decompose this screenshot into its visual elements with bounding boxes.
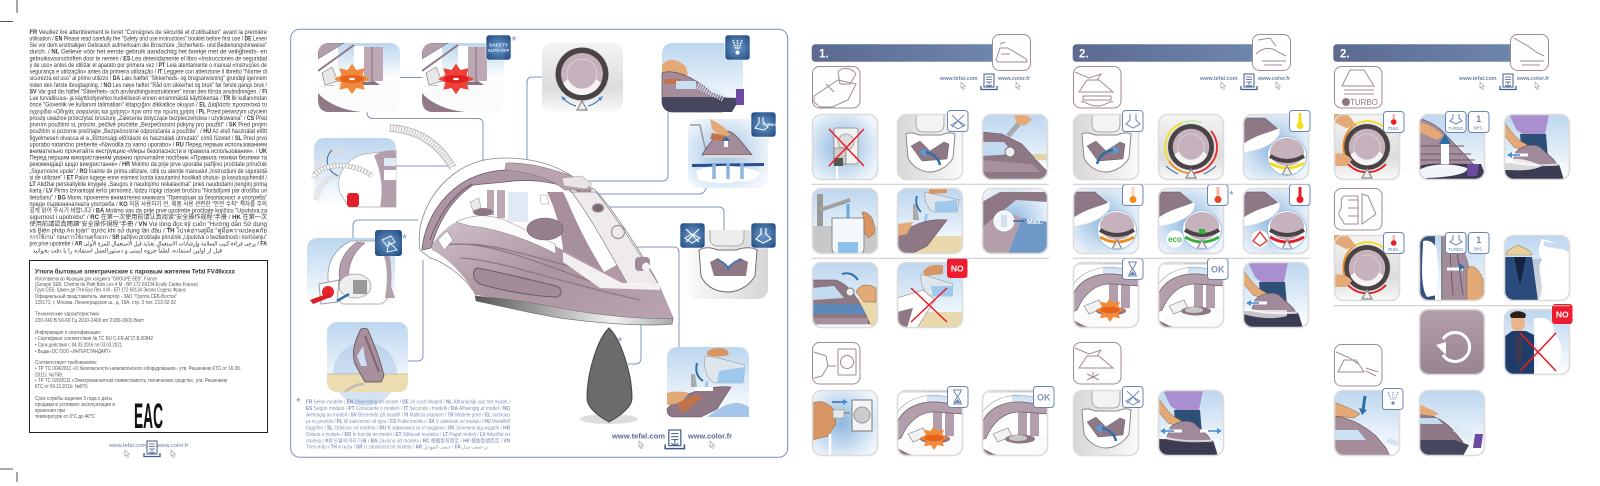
icon: one second <box>1468 112 1489 132</box>
text block: product details: 220-240 В 50-60 Гц 2010-2400 вт/ 2180-2600 Ватт <box>35 318 144 324</box>
tile: orange warning light <box>318 43 400 112</box>
small icon: fill water <box>812 66 860 108</box>
icon: no steam <box>1122 386 1143 408</box>
tile: yellow setting <box>1243 114 1309 180</box>
website links: www.tefal.com <box>939 76 978 82</box>
tile: vertical steaming <box>1419 235 1485 301</box>
tile: light off <box>982 390 1048 456</box>
icon: hourglass <box>948 386 968 408</box>
text block: multilingual safety notice: εγχειρίδιο «Οδηγίες ασφαλείας και χρήσης» πριν από την πρώτη χρήση / PL Przed pierwszym użyciem <box>30 108 267 115</box>
text block: product details: • ТР ТС 004/2011 «О безопасности низковольтного оборудования», утв. Решением КТС от 16.08. <box>35 366 241 372</box>
badge: NO: NO <box>1556 310 1569 320</box>
tile: max temperature dial <box>1334 235 1400 301</box>
icon: anti-scale <box>375 230 402 256</box>
text block: product details: Официальный представитель, импортёр - ЗАО "Группа СЕБ-Восток" <box>35 293 177 300</box>
icon: OK <box>1208 258 1228 280</box>
header bar 1 <box>812 44 1002 62</box>
small icon: spray iron <box>1334 344 1382 386</box>
text block: product details: 2011г. №768; <box>35 373 63 379</box>
crop marks <box>0 0 17 482</box>
small icon: plug <box>812 342 860 384</box>
text block: multilingual safety notice: inden den første ibrugtagning. / NO Les nøye heftet "Råd om sikkerhet og bruk" før første gangs bruk / <box>30 82 267 89</box>
text block: product details: (Groupe SEB, Chemin du Petit Bois Les 4 M - BP 172 69134 Ecully Cedex France) <box>35 282 198 288</box>
website links: www.color.fr <box>997 76 1031 82</box>
text block: product details: Груп СЕБ, Шмен де Пти Буа Лез 4 М - БП 172 69134 Эколи Седекс Франс <box>35 288 186 294</box>
soleplate variant <box>580 328 638 424</box>
icon: OK: OK <box>1037 392 1051 402</box>
text block: multilingual safety notice: рекомендації щодо використання» / HR Molimo da prije prve uporabe pažljivo pročitate priručnik <box>30 161 268 168</box>
footnote: depending on model: * <box>296 395 301 409</box>
asterisk note marker: * <box>402 231 407 246</box>
icon: max temperature <box>1384 232 1404 254</box>
text block: multilingual safety notice: „Sigurnosne upute" / RO Înainte de prima utilizare, citiți cu atenție manualul „Instrucțiuni de siguranță <box>30 168 267 175</box>
icon: max temperature: max. <box>1388 247 1400 253</box>
tile: ironing with steam <box>1243 262 1309 328</box>
text block: multilingual safety notice: prvním použitím si, prosím, pečlivě pročtěte „Bezpečnostní pokyny pro použití" / SK Pred prvým <box>30 122 267 128</box>
tile: wait for light <box>897 390 963 456</box>
panel: Russian product information box: EAC <box>134 397 163 436</box>
section 1: filling <box>812 34 1054 456</box>
header bar 2 <box>1333 44 1523 62</box>
tile: turbo burst <box>1419 114 1485 180</box>
small icon: steam iron <box>1074 66 1121 108</box>
text block: multilingual safety notice: преди първоначалната употреба / KO 처음 사용하기 전, 제품 사용 관련한 "안전 수칙" 책자를 주의 <box>30 200 267 208</box>
tile: open filler cap <box>982 114 1048 180</box>
tile: return to start <box>1419 309 1485 375</box>
website links <box>1199 74 1291 90</box>
header icon: iron outline <box>992 34 1030 70</box>
tile: temperature dial <box>1158 114 1224 180</box>
soleplate edge <box>475 296 673 325</box>
icon: OK: OK <box>1211 264 1225 274</box>
tile: selector no steam <box>897 114 963 180</box>
tile: close cap <box>812 262 878 328</box>
text block: multilingual safety notice: și de utilizare" / ET Palun lugege enne esimest korda kasutamist hoolikalt ohutus- ja kasutusjuhendit / <box>30 174 267 182</box>
icon: turbo <box>1446 112 1466 132</box>
icon: max temperature <box>1384 112 1404 132</box>
icon: steam on <box>751 223 776 248</box>
header icon: iron outline <box>1252 34 1290 70</box>
header icon: iron outline <box>1510 34 1548 70</box>
text block: multilingual safety notice: y de uso» antes de utilizar el aparato por primera vez / PT Leia atentamente o manual «Instruções de <box>30 62 267 69</box>
text block: product details <box>35 276 241 420</box>
text block: multilingual safety notice: proszę uważnie przeczytać broszurę „Zalecenia dotyczące bezpieczeństwa i użytkowania" / CS Před <box>30 115 267 122</box>
tile: ready <box>1158 262 1224 328</box>
website links: www.color.fr <box>1257 76 1291 82</box>
website links: left column <box>108 441 188 458</box>
asterisk note marker: * <box>618 334 623 349</box>
text block: product details: • Выдан ОС ООО «ИНТЕРСТАНДАРТ» <box>35 349 111 355</box>
text block: multilingual safety notice <box>30 29 268 254</box>
text block: multilingual safety notice: Sie vor dem erstmaligen Gebrauch aufmerksam die Broschüre „Sicherheits- und Bedienungshinweise" <box>30 42 267 49</box>
website links <box>939 74 1031 90</box>
icon: one second: sec. <box>1473 126 1484 132</box>
tile: eco setting: eco <box>1168 235 1182 244</box>
tile: orange setting <box>1073 188 1139 254</box>
text block: product details: Соответствует требованиям: <box>35 360 97 366</box>
icon: high temperature <box>1290 184 1310 206</box>
text block: multilingual safety notice: pre prve upotrebe / AR يرجى قراءة كتيب السلامة وإرشادات الاستعمال بعناية قبل الاستعمال للمرة الأولى / FA <box>30 240 267 248</box>
text block: product details: Технические характеристики <box>35 312 99 318</box>
asterisk note marker: * <box>512 33 517 48</box>
icon: medium temperature <box>1122 184 1143 206</box>
badge: NO <box>947 258 968 278</box>
tile: max level <box>982 188 1048 254</box>
tile: spraying <box>1419 390 1485 456</box>
tile: selector off <box>1073 390 1139 456</box>
text block: product details: Срок службы изделия 3 года с даты <box>35 396 112 402</box>
tile: plug in <box>812 390 878 456</box>
icon: one second: 1 <box>1476 114 1481 124</box>
footnote: depending on model: με το μοντέλο / PL W zależności od typu / CS Podle modelu / SK V závislosti od modelu / HU Modelltől <box>306 418 510 425</box>
tile: red warning light <box>422 43 504 112</box>
footnote: depending on model <box>296 395 510 450</box>
section 2: steam ironing <box>1072 34 1310 456</box>
website links: main panel: www.color.fr <box>687 434 732 440</box>
footnote: depending on model: ES Según modelo / PT Consoante o modelo / IT Secondo i modelli / DA Afhængig af model / NO <box>306 406 510 412</box>
text block: multilingual safety notice: внимательно прочитайте инструкцию «Меры безопасности и правила использования». / UK <box>30 148 267 155</box>
icon: turbo <box>1446 232 1466 254</box>
icon: no steam <box>948 110 968 132</box>
tile: ironing with burst <box>1504 114 1570 180</box>
main iron illustration <box>390 128 673 325</box>
text block: product details: 125171, г. Москва, Ленинградское ш., д. 16А, стр. 3 тел. 213-32-32 <box>35 300 176 306</box>
icon: steam off <box>680 223 705 248</box>
badge: NO: NO <box>951 264 964 274</box>
website links <box>1458 74 1550 90</box>
text block: multilingual safety notice: 깊게 읽어 주시기 바랍니다 / BA Molimo vas da prije prve upotrebe pročitate knjižicu "Uputstva za <box>30 207 268 215</box>
text block: multilingual safety notice: gebruiksvoorschriften door te nemen / ES Lea detenidamente el libro «Instrucciones de seguridad <box>30 55 267 62</box>
text block: product details: температуре от 0°C до 40°C <box>35 414 95 420</box>
tile: steam selector <box>688 230 768 299</box>
tile: high setting <box>1243 188 1309 254</box>
tile: selector steam <box>1073 114 1139 180</box>
footnote: depending on model: modeļa / KO 모델에 따라 다름 / BA Zavisno od modela / RC 根据型号而定 / HK 根據型號而定 / VN <box>306 436 510 444</box>
website links: left column: www.color.fr <box>156 443 188 449</box>
small icon: turbo iron: TURBO <box>1350 98 1378 107</box>
website links: www.tefal.com <box>1199 76 1238 82</box>
tile: fill jug at tap <box>812 188 878 254</box>
icon: low temperature <box>1290 110 1310 132</box>
text block: product details: • Сертификат соответствия № ТС RU C-FR.АГ27.В.00842 <box>35 336 153 342</box>
tile: spray button press <box>1334 390 1400 456</box>
text block: multilingual safety notice: FR Veuillez lire attentivement le livret "Consignes de sécurité et d'utilisation" avant la première <box>30 29 268 36</box>
footnote: depending on model: függően / SL Odvisno od modela / RU В зависимости от модели / UK Залежно від моделі / HR <box>306 426 510 432</box>
text block: multilingual safety notice: sicurezza ed uso" al primo utilizzo / DA Læs hæftet "Sikkerheds- og brugsanvisning" grundigt igennem <box>30 75 267 82</box>
website links: main panel <box>611 430 732 449</box>
tile: spray button <box>662 43 744 112</box>
icon: one second: sec. <box>1473 246 1484 252</box>
small icon: turbo iron <box>1334 66 1382 108</box>
tile: anti-scale switch <box>307 238 395 308</box>
icon: one second <box>1468 232 1489 254</box>
text block: multilingual safety notice: figyelmesen olvassa el a „Biztonsági előírások és használati útmutató" című füzetet / SL Pred prvo <box>30 135 267 142</box>
text block: multilingual safety notice: kartą / LV Pirms izmantojat ierīci pirmoreiz, lūdzu rūpīgi izlasiet brošūru "Norādījumi par drošību un <box>30 188 267 195</box>
tile: do not steam on clothes worn <box>1504 309 1570 375</box>
text block: multilingual safety notice: và Biện pháp An toàn" trước khi sử dụng lần đầu / TH โปรดอ่านคู่มือ "คู่มือความปลอดภัย <box>30 226 267 234</box>
text block: product details: продажи в условиях эксплуатации и <box>35 402 115 408</box>
icon: turbo: TURBO <box>1448 126 1464 131</box>
tile: eco setting <box>1158 188 1224 254</box>
footnote: depending on model: Theo mẫu / TH ตามรุ่น / SR U zavisnosti od modela / AR حسب الموديل / FA بر حسب مدل <box>306 444 488 450</box>
header bar 2: 2. <box>1340 48 1350 60</box>
tile: jacket on hanger <box>1504 235 1570 301</box>
icon: steam <box>1122 110 1143 132</box>
text block: multilingual safety notice: segurança e utilização» antes da primeira utilização / IT Leggere con attenzione il libretto "Norme di <box>30 68 267 76</box>
tile: iron on its heel <box>327 322 408 406</box>
header bar 1: 1. <box>819 48 829 60</box>
icon: one second: 1 <box>1476 235 1481 245</box>
text block: multilingual safety notice: použitím si pozorne prečítajte „Bezpečnostné odporúčania a použitie". / HU Az első használat előtt <box>30 128 267 135</box>
footnote: depending on model: FR Selon modèle / EN Depending on model / DE Je nach Modell / NL Afhankelijk van het model / <box>306 400 510 406</box>
icon: spray <box>725 35 750 60</box>
text block: multilingual safety notice: sigurnost i upotrebu" / RC 在第一次使用前请认真阅读"安全操作规程"手册 / HK 在第一次 <box>30 213 267 221</box>
icon: spray <box>1382 388 1403 410</box>
power cord <box>390 128 453 168</box>
text block: multilingual safety notice: قبل از اولین استفاده، لطفاً جزوه ایمنی و دستورالعمل استفاده را با دقت بخوانید <box>33 246 222 254</box>
text block: multilingual safety notice: önce "Güvenlik ve kullanım talimatları" kitapçığını dikkatlice okuyun / EL Διαβάστε προσεκτικά το <box>30 102 267 109</box>
tile: max temperature dial <box>1334 114 1400 180</box>
asterisk note marker: * <box>1229 188 1234 202</box>
tile: wait for light <box>1073 262 1139 328</box>
tile: unplugged warning <box>812 114 878 180</box>
icon: max temperature: max. <box>1388 126 1400 132</box>
text block: multilingual safety notice: LT Atidžiai perskaitykite knygelę „Saugos ir naudojimo reikalavimai" prieš naudodami įrenginį pirmą <box>30 181 267 188</box>
website links: left column: www.tefal.com <box>108 443 147 449</box>
text block: multilingual safety notice: Перед першим використанням уважно прочитайте посібник «Правила техніки безпеки та <box>30 155 268 162</box>
tile: thermostat dial <box>542 43 623 112</box>
small icon: dry iron <box>1074 342 1121 384</box>
badge: NO <box>1552 304 1572 324</box>
tile: dry ironing <box>1158 390 1224 456</box>
small icon: vertical steam <box>1334 188 1382 230</box>
footnote: depending on model: Avhengig av modell / SV Beroende på modell / FI Mallista riippuen / TR Modele göre / EL ανάλογα <box>306 412 510 418</box>
tile: pour water <box>897 188 963 254</box>
footnote: depending on model: Ovisno o modelu / RO În funcție de model / ET Sõltuvalt mudelist / LT Pagal modelį / LV Atkarībā no <box>306 431 510 438</box>
website links: www.color.fr <box>1516 76 1550 82</box>
text block: product details: КТС от 09.12.2011г. №879; <box>35 384 88 390</box>
text block: product details: Изготовлено во Франции для холдинга "GROUPE SEB", France <box>35 276 157 282</box>
icon: turbo steam <box>751 112 776 137</box>
text block: multilingual safety notice: uporabo natančno preberite «Navodila za varno uporabo» / RU Перед первым использованием <box>30 141 267 148</box>
tile: filling the tank <box>667 347 749 417</box>
icon: safety auto-off <box>486 35 511 60</box>
panel: main iron overview <box>291 29 788 457</box>
section 3: turbo steam and spray <box>1333 34 1572 456</box>
text block: multilingual safety notice: SV Var god läs häftet "Säkerhets- och användningsinstruktioner" innan den första användningen. / FI <box>30 88 267 95</box>
tile: turbo steam burst <box>688 119 768 188</box>
text block: product details: Информация о сертификации: <box>35 330 101 336</box>
header bar 2 <box>1073 44 1263 62</box>
header bar 2: 2. <box>1079 48 1089 60</box>
text block: multilingual safety notice: Lue turvallisuus- ja käyttöohjevihko huolellisesti ennen ensimmäistä käyttökertaa / TR İlk kullanımdan <box>30 95 267 102</box>
tile: max level: Max. <box>1027 219 1043 226</box>
tile: do not overfill <box>897 262 963 328</box>
icon: safety auto-off: SAFETY <box>489 42 509 48</box>
text block: multilingual safety notice: lietošanu" / BG Моля, прочетете внимателно книжката "Препоръки за безопасност и употреба" <box>30 194 267 201</box>
text block: product details: • ТР ТС 020/2011 «Электромагнитная совместимость технических средств», утв. Решением <box>35 378 227 384</box>
icon: hourglass <box>1122 258 1143 280</box>
text block: multilingual safety notice: 使用前請認真閱讀"安全操作規程"手冊 / VN Vui lòng đọc kỹ cuốn "Hướng dẫn Sử dụng <box>30 220 268 228</box>
text block: product details: • Срок действия с 04.03.2016 по 03.03.2021 <box>35 342 122 348</box>
heading: product title: Утюги бытовые электрические с паровым жителем Tefal FV49xxxx <box>35 268 235 276</box>
tile: cord rotation <box>314 138 396 207</box>
text block: multilingual safety notice: durch. / NL Gelieve vóór het eerste gebruik aandachtig het boekje met de veiligheids- en <box>30 49 268 56</box>
icon: eco temperature <box>1208 184 1228 206</box>
icon: turbo steam: TURBO <box>763 123 776 127</box>
panel: Russian product information box <box>30 260 268 436</box>
icon: OK <box>1034 386 1054 408</box>
text block: multilingual safety notice: การใช้งาน" ก่อนการใช้งานครั้งแรก / SR pažljivo pročitajte priručnik „Uputstva o bezbednosti i korišćenju" <box>30 232 267 241</box>
website links: www.tefal.com <box>1458 76 1497 82</box>
icon: turbo: TURBO <box>1448 247 1464 252</box>
connector lines <box>353 77 724 364</box>
text block: product details: хранения при <box>35 408 65 414</box>
text block: multilingual safety notice: utilisation / EN Please read carefully the "Safety and use instructions" booklet before first use / DE Lesen <box>30 35 267 42</box>
icon: safety auto-off: AUTO-OFF <box>488 48 510 53</box>
website links: main panel: www.tefal.com <box>611 434 665 440</box>
